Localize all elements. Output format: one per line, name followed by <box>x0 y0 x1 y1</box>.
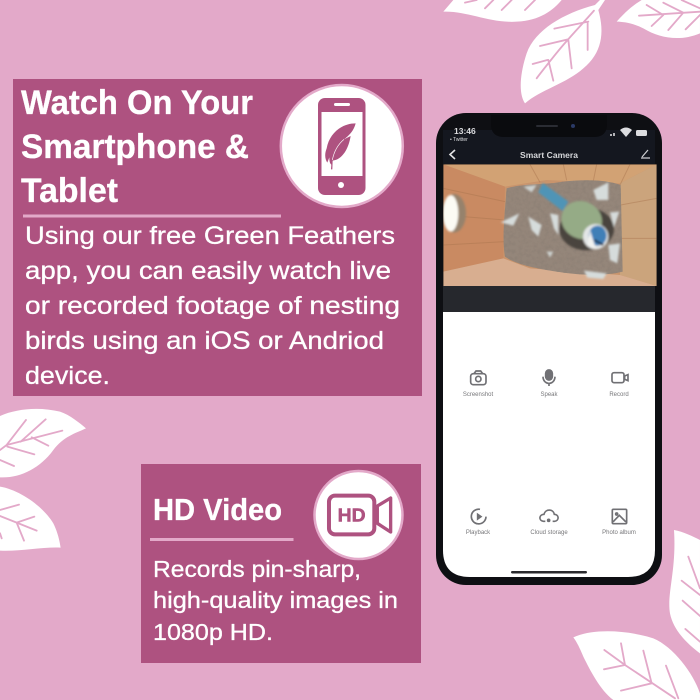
label: photo album: Photo album <box>602 530 636 536</box>
body text <box>153 556 398 645</box>
label: record: Record <box>609 392 629 398</box>
smartphone mockup <box>436 113 662 585</box>
icon: playback <box>471 509 486 524</box>
label: speak: Speak <box>540 392 559 398</box>
leaf: upper left <box>0 409 86 477</box>
leaf: right <box>617 0 700 38</box>
body text: 1080p HD. <box>153 619 273 645</box>
body text: device. <box>25 362 110 390</box>
icon: cloud <box>540 510 558 521</box>
notch <box>491 115 607 137</box>
body text: Using our free Green Feathers <box>25 222 395 250</box>
body text: high-quality images in <box>153 587 398 613</box>
leaf: bottom <box>573 631 700 700</box>
app title bar: Smart Camera <box>520 150 578 160</box>
decorative leaves: bottom right <box>573 530 700 700</box>
label: cloud storage: Cloud storage <box>530 530 568 536</box>
nest box photo <box>442 164 657 286</box>
icon: phone with feather <box>281 85 403 207</box>
heading line 3: Tablet <box>21 172 118 210</box>
leaf: lower left <box>0 487 61 551</box>
body text: or recorded footage of nesting <box>25 292 400 320</box>
icon: photo <box>612 509 627 524</box>
status bar <box>450 126 647 143</box>
icon: hd video camera <box>314 471 402 559</box>
status bar: 13:46 <box>454 126 476 136</box>
body text: app, you can easily watch live <box>25 257 391 285</box>
leaf: centre <box>521 0 605 103</box>
body text: birds using an iOS or Andriod <box>25 327 384 355</box>
label: screenshot: Screenshot <box>463 392 494 398</box>
home indicator <box>511 571 587 574</box>
icon: video camera <box>612 373 628 383</box>
app title bar <box>450 150 650 160</box>
label: playback: Playback <box>466 530 491 536</box>
heading: HD Video <box>153 492 282 527</box>
icon: microphone <box>543 370 555 386</box>
decorative leaves: left <box>0 409 86 551</box>
panel: watch on your smartphone and tablet <box>13 79 422 396</box>
decorative leaves: top right <box>443 0 700 103</box>
leaf: top left <box>443 0 562 22</box>
control grid: icons and labels <box>463 370 636 536</box>
body text <box>25 222 400 390</box>
heading line 2: Smartphone & <box>21 128 249 166</box>
icon: hd video camera: HD <box>338 504 366 525</box>
leaf: right edge <box>669 530 700 653</box>
body text: Records pin-sharp, <box>153 556 361 582</box>
status bar: • Twitter <box>450 137 468 143</box>
panel: hd video <box>141 464 421 663</box>
heading: Watch On Your <box>21 84 253 122</box>
icon: camera <box>471 371 486 385</box>
